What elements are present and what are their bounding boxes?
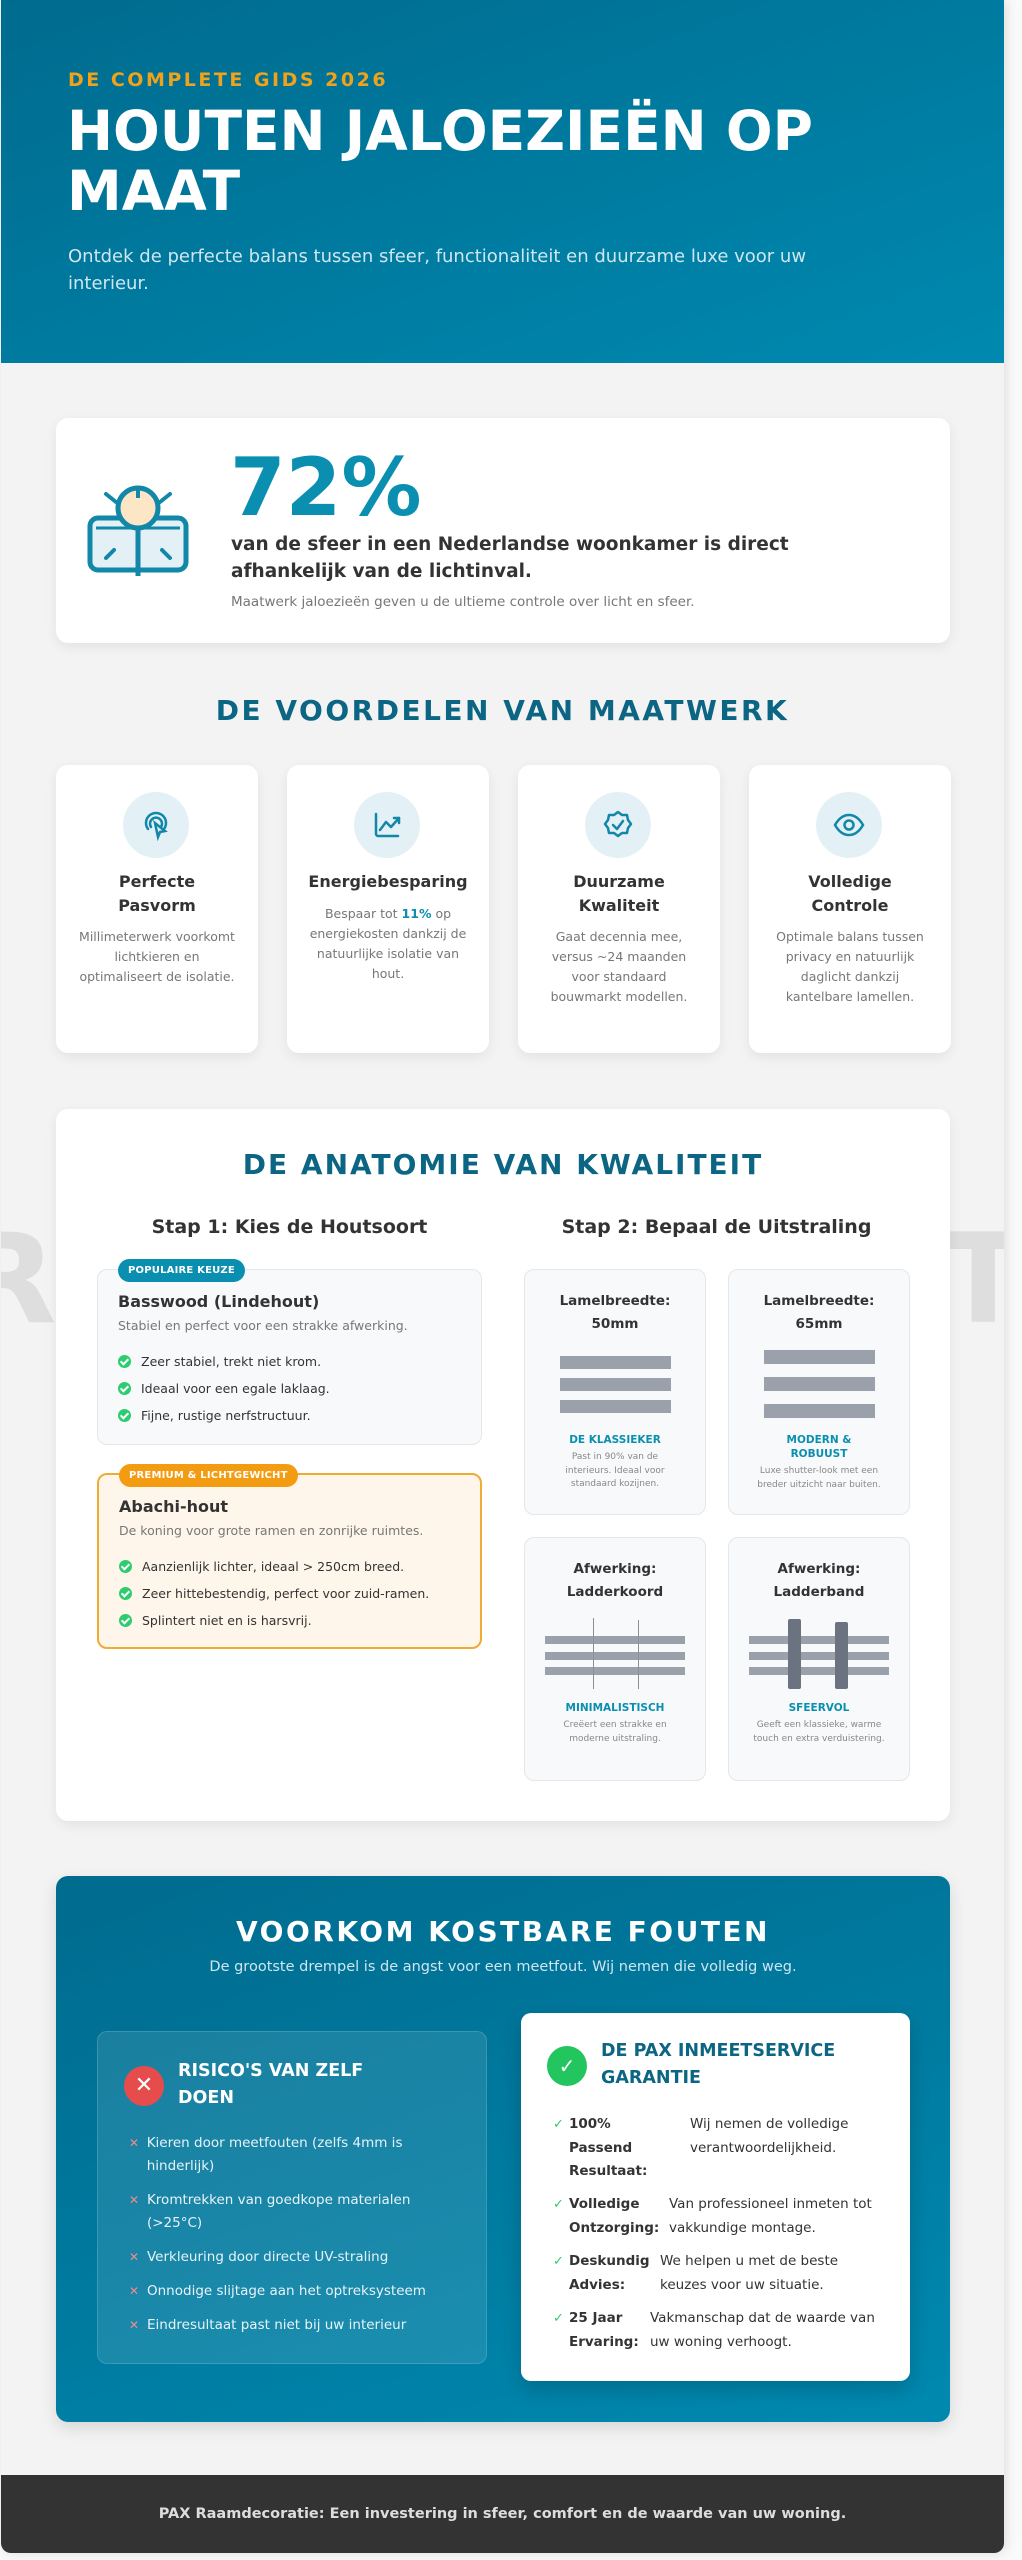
panel: garantie: DE PAX INMEETSERVICE — [601, 2041, 835, 2061]
option: ladderkoord: Afwerking: — [574, 1561, 656, 1577]
risk list: ✕ — [129, 2284, 139, 2298]
icon: red x: ✕ — [135, 2073, 153, 2098]
option: ladderkoord: Creëert een strakke en moderne uitstraling. — [563, 1720, 667, 1744]
option: ladderband: SFEERVOL — [789, 1702, 849, 1714]
stat text: van de sfeer in een Nederlandse woonkamer is direct afhankelijk van de lichtinval. — [231, 534, 789, 582]
heading: fouten: VOORKOM KOSTBARE FOUTEN — [236, 1915, 770, 1948]
panel: benefit 4: Optimale balans tussen privacy en natuurlijk daglicht dankzij kantelbare lamellen. — [776, 929, 924, 1004]
panel: benefit 4: Volledige — [808, 872, 892, 891]
option: 65mm — [728, 1269, 910, 1515]
panel: anatomie — [56, 1109, 950, 1821]
icon: pointer — [123, 792, 189, 858]
header — [1, 0, 1004, 363]
panel: garantie: Volledige Ontzorging: — [569, 2196, 659, 2236]
option: 50mm — [524, 1269, 706, 1515]
panel: abachi: Zeer hittebestendig, perfect voor zuid-ramen. — [142, 1586, 429, 1600]
panel: abachi: Abachi-hout — [119, 1497, 228, 1516]
panel: risico's — [97, 2031, 487, 2364]
heading: anatomie: DE ANATOMIE VAN KWALITEIT — [243, 1148, 763, 1181]
panel: benefit 3 — [518, 765, 720, 1053]
guarantee rows: ✓ — [553, 2117, 564, 2132]
risk list: ✕ — [129, 2250, 139, 2264]
panel: benefit 2 — [287, 765, 489, 1053]
risk list: ✕ — [129, 2193, 139, 2207]
icon: red x — [124, 2066, 164, 2106]
big number: 72% — [230, 441, 421, 534]
risk list — [129, 2135, 426, 2333]
panel: basswood: Ideaal voor een egale laklaag. — [141, 1380, 330, 1396]
panel: abachi: Splintert niet en is harsvrij. — [142, 1612, 312, 1628]
risk list: ✕ — [129, 2318, 139, 2332]
risk list: Kieren door meetfouten (zelfs 4mm is hinderlijk) — [147, 2135, 402, 2174]
panel: benefit 4: Controle — [812, 896, 888, 915]
subtitle: De grootste drempel is de angst voor een meetfout. Wij nemen die volledig weg. — [209, 1959, 797, 1975]
panel: garantie: Van professioneel inmeten tot vakkundige montage. — [669, 2196, 872, 2236]
footer: PAX Raamdecoratie: Een investering in sfeer, comfort en de waarde van uw woning. — [159, 2506, 846, 2522]
risk list: ✕ — [129, 2136, 139, 2150]
panel: benefit 1: Perfecte — [119, 872, 195, 891]
icon: chart — [354, 792, 420, 858]
icon: badge check — [585, 792, 651, 858]
option: 50mm: Lamelbreedte: — [560, 1293, 670, 1309]
panel: garantie: 25 Jaar Ervaring: — [569, 2310, 639, 2350]
heading: stap 1: Stap 1: Kies de Houtsoort — [152, 1216, 427, 1238]
option: ladderkoord — [524, 1537, 706, 1781]
panel: benefit 3: Duurzame — [573, 872, 665, 891]
panel: basswood: Stabiel en perfect voor een strakke afwerking. — [118, 1318, 408, 1333]
option: 65mm: Luxe shutter-look met een breder uitzicht naar buiten. — [757, 1466, 881, 1490]
panel: risico's: DOEN — [178, 2088, 234, 2108]
option: 65mm: Lamelbreedte: — [764, 1293, 874, 1309]
panel: risico's: RISICO'S VAN ZELF — [178, 2061, 363, 2081]
option: 65mm: 65mm — [796, 1316, 842, 1332]
guarantee rows: 100% Passend Resultaat: — [569, 2116, 647, 2179]
icon: green check — [547, 2046, 587, 2086]
panel: basswood: Fijne, rustige nerfstructuur. — [141, 1408, 311, 1422]
stat note: Maatwerk jaloezieën geven u de ultieme controle over licht en sfeer. — [231, 594, 695, 610]
icon: green check: ✓ — [559, 2054, 575, 2078]
panel: fouten — [56, 1876, 950, 2422]
option: ladderkoord: MINIMALISTISCH — [566, 1702, 664, 1714]
panel: abachi: Aanzienlijk lichter, ideaal > 250cm breed. — [142, 1558, 404, 1574]
panel: garantie: Deskundig Advies: — [569, 2253, 650, 2292]
title: HOUTEN JALOEZIEËN OP MAAT — [67, 99, 813, 223]
panel: benefit 1: Millimeterwerk voorkomt lichtkieren en optimaliseert de isolatie. — [79, 929, 235, 984]
panel: abachi: De koning voor grote ramen en zonrijke ruimtes. — [119, 1523, 423, 1538]
option: ladderband — [728, 1537, 910, 1781]
icon: eye — [816, 792, 882, 858]
panel: benefit 2: Bespaar tot 11% op energiekosten dankzij de natuurlijke isolatie van hout. — [310, 906, 466, 981]
heading: voordelen: DE VOORDELEN VAN MAATWERK — [216, 694, 789, 727]
badge — [118, 1259, 245, 1282]
option: ladderband: Ladderband — [774, 1584, 864, 1600]
panel: abachi — [97, 1473, 482, 1649]
option: 65mm: MODERN & — [787, 1434, 851, 1446]
risk list: Eindresultaat past niet bij uw interieur — [147, 2317, 406, 2333]
option: 50mm: DE KLASSIEKER — [569, 1434, 661, 1446]
risk list: Kromtrekken van goedkope materialen (>25°C) — [147, 2192, 410, 2231]
panel: benefit 2: Energiebesparing — [308, 872, 468, 891]
footer — [1, 2475, 1004, 2553]
panel: benefit 1 — [56, 765, 258, 1053]
guarantee rows — [553, 2116, 848, 2179]
panel: benefit 3: Kwaliteit — [579, 896, 659, 915]
stat card — [56, 418, 950, 643]
panel: garantie — [521, 2013, 910, 2381]
panel: garantie: ✓ — [553, 2254, 564, 2269]
option: 50mm: Past in 90% van de interieurs. Ideaal voor standaard kozijnen. — [565, 1452, 665, 1489]
option: 65mm: ROBUUST — [791, 1448, 847, 1460]
panel: garantie: ✓ — [553, 2311, 564, 2326]
panel: garantie: GARANTIE — [601, 2068, 701, 2088]
eyebrow: DE COMPLETE GIDS 2026 — [68, 69, 388, 91]
option: ladderband: Afwerking: — [778, 1561, 860, 1577]
badge: PREMIUM & LICHTGEWICHT — [129, 1470, 288, 1481]
icon: window reader — [88, 486, 188, 576]
panel: garantie: Vakmanschap dat de waarde van uw woning verhoogt. — [650, 2310, 875, 2350]
guarantee rows: Wij nemen de volledige verantwoordelijkheid. — [690, 2116, 848, 2156]
heading: stap 2: Stap 2: Bepaal de Uitstraling — [562, 1216, 871, 1238]
option: ladderkoord: Ladderkoord — [567, 1584, 663, 1600]
badge: POPULAIRE KEUZE — [128, 1265, 235, 1276]
panel: basswood — [97, 1269, 482, 1445]
risk list: Verkleuring door directe UV-straling — [147, 2249, 388, 2265]
risk list: Onnodige slijtage aan het optreksysteem — [147, 2283, 426, 2299]
panel: garantie: We helpen u met de beste keuzes voor uw situatie. — [660, 2253, 838, 2292]
panel: benefit 3: Gaat decennia mee, versus ~24 maanden voor standaard bouwmarkt modellen. — [551, 929, 687, 1004]
panel: basswood: Zeer stabiel, trekt niet krom. — [141, 1354, 321, 1368]
panel: benefit 4 — [749, 765, 951, 1053]
subtitle: Ontdek de perfecte balans tussen sfeer, functionaliteit en duurzame luxe voor uw interieur. — [68, 246, 806, 294]
panel: basswood: Basswood (Lindehout) — [118, 1292, 319, 1311]
badge — [119, 1464, 298, 1487]
option: 50mm: 50mm — [592, 1316, 638, 1332]
option: ladderband: Geeft een klassieke, warme touch en extra verduistering. — [753, 1720, 885, 1744]
panel: garantie: ✓ — [553, 2197, 564, 2212]
panel: benefit 1: Pasvorm — [118, 896, 196, 915]
